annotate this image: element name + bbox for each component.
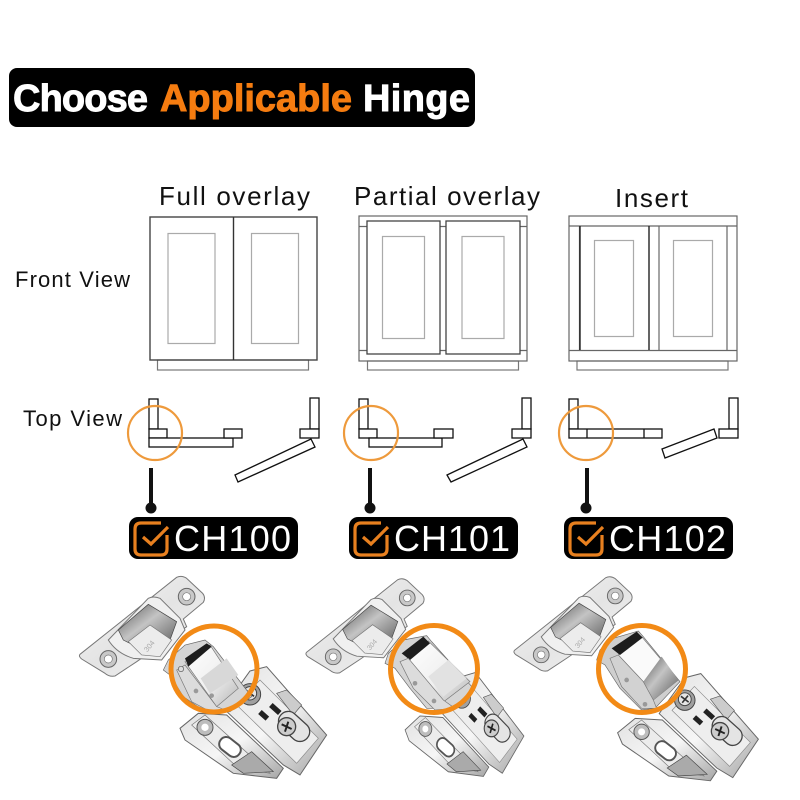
top view: full overlay — [149, 398, 319, 482]
row label: Front View: Front View — [15, 267, 130, 292]
highlight circle: insert — [559, 406, 613, 460]
orange ring: CH101 — [390, 626, 478, 712]
top view: partial overlay — [359, 398, 531, 482]
front view: partial overlay cabinet — [359, 216, 527, 370]
heading: Full overlay: Full overlay — [159, 181, 310, 211]
hinge photo: CH100 — [79, 576, 327, 778]
row label: Top View: Top View — [23, 406, 122, 431]
hinge photo: CH101 — [306, 579, 524, 776]
heading: Insert: Insert — [615, 183, 689, 213]
title banner — [9, 68, 475, 127]
title banner: Choose — [13, 78, 148, 120]
title banner: Hinge — [363, 78, 470, 120]
orange ring: CH102 — [598, 626, 686, 712]
badge: CH102 — [564, 517, 733, 559]
badge: CH102: CH102 — [609, 518, 726, 559]
connector: insert — [580, 468, 592, 514]
highlight circle: full overlay — [128, 406, 182, 460]
title banner: Applicable — [160, 78, 352, 120]
badge: CH101: CH101 — [394, 518, 510, 559]
heading: Partial overlay: Partial overlay — [354, 181, 540, 211]
hinge photo: CH102 — [514, 577, 758, 781]
badge: CH100: CH100 — [174, 518, 291, 559]
badge: CH101 — [349, 517, 518, 559]
top view: insert — [569, 398, 738, 458]
front view: full overlay cabinet — [150, 217, 317, 370]
connector: full overlay — [146, 468, 156, 514]
badge: CH100 — [129, 517, 298, 559]
highlight circle: partial overlay — [344, 406, 398, 460]
orange ring: CH100 — [171, 626, 257, 712]
front view: insert cabinet — [569, 216, 737, 370]
connector: partial overlay — [364, 468, 376, 514]
